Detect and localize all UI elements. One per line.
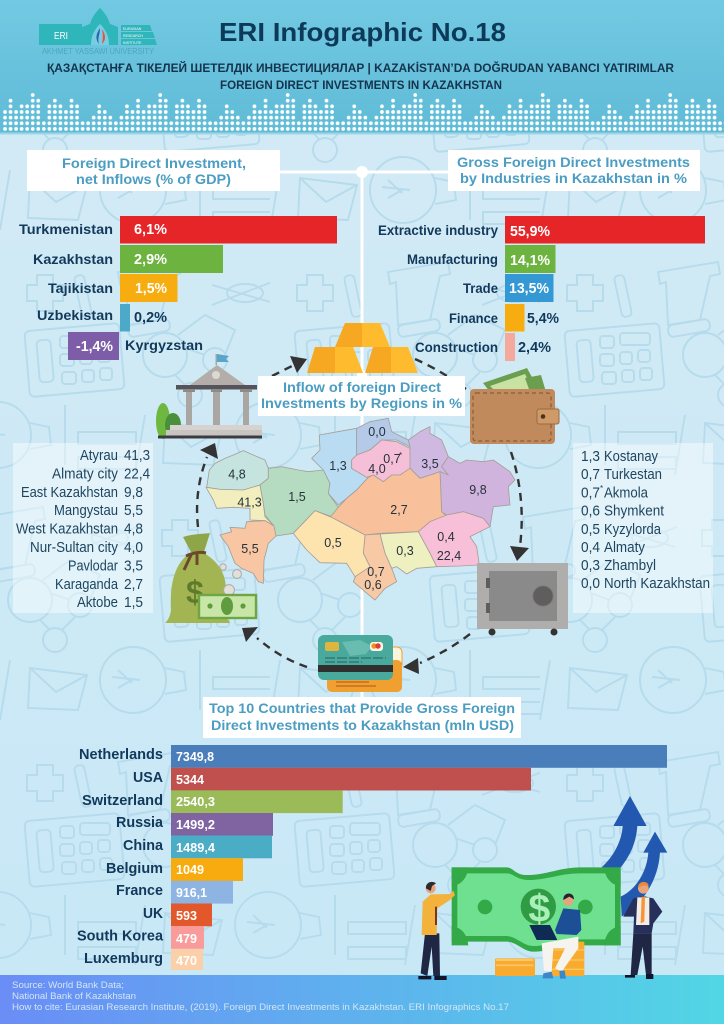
heading: top 10 countries: Top 10 Countries that Provide Gross Foreign: [209, 700, 515, 716]
logo: RESEARCH: [123, 34, 143, 38]
icon: wallet: [470, 368, 559, 444]
map value labels: 2,7: [390, 503, 408, 517]
bar chart: top 10 countries: [77, 745, 667, 970]
panel: regions list right: Kyzylorda: [604, 521, 662, 538]
map value labels: 1,3: [329, 459, 347, 473]
bar chart: FDI by industries: Trade: [463, 280, 498, 296]
panel: regions list left: 22,4: [124, 465, 150, 482]
person middle: [529, 894, 581, 979]
logo: INSTITUTE: [123, 41, 142, 45]
bar chart: top 10 countries: UK: [143, 905, 163, 922]
map value labels: 3,5: [421, 457, 439, 471]
panel: regions list right: [573, 443, 713, 613]
bar chart: top 10 countries: 1489,4: [176, 841, 215, 855]
heading: net inflows: net Inflows (% of GDP): [76, 171, 231, 187]
logo: ERI: [54, 31, 68, 42]
bar chart: FDI by industries: 55,9%: [510, 223, 550, 240]
footer band: [0, 975, 724, 1024]
panel: regions list right: Akmola: [604, 484, 649, 502]
panel: regions list left: Karaganda: [55, 576, 119, 593]
panel: regions list left: Pavlodar: [68, 557, 118, 574]
heading: industries: by Industries in Kazakhstan in %: [460, 170, 688, 186]
panel: regions list right: 0,6: [581, 502, 600, 520]
panel: regions list right: 0,4: [581, 539, 600, 556]
bar chart: FDI net inflows: -1,4%: [76, 338, 113, 355]
arrow: gold to wallet: [415, 359, 466, 389]
arrow: bank to gold: [272, 356, 307, 376]
bar chart: top 10 countries: 470: [176, 954, 197, 968]
heading: net inflows: Foreign Direct Investment,: [62, 155, 246, 171]
bar chart: FDI by industries: 13,5%: [509, 280, 549, 297]
map value labels: 4,8: [228, 468, 246, 482]
bar chart: FDI net inflows: [19, 216, 337, 360]
bar chart: FDI by industries: 5,4%: [527, 310, 559, 327]
title: ERI Infographic No.18: [219, 17, 506, 47]
panel: regions list left: Mangystau: [54, 502, 118, 519]
map value labels: 0,5: [324, 536, 342, 550]
panel: regions list left: 3,5: [124, 557, 143, 574]
bar chart: top 10 countries: Switzerland: [82, 792, 163, 809]
source and citation: National Bank of Kazakhstan: [12, 991, 136, 1002]
icon: gold bars: [307, 323, 418, 373]
bar chart: FDI by industries: Extractive industry: [378, 222, 498, 238]
illustration: investors with banknote and growth arrows: [418, 796, 667, 980]
banknote: [452, 867, 621, 952]
subtitle: FOREIGN DIRECT INVESTMENTS IN KAZAKHSTAN: [220, 78, 502, 92]
bar chart: FDI net inflows: 1,5%: [135, 280, 167, 297]
bar chart: FDI net inflows: 2,9%: [134, 251, 167, 268]
panel: regions list right: 0,7: [581, 466, 600, 483]
heading: inflow by regions: Inflow of foreign Direct: [283, 379, 441, 395]
map value labels: 5,5: [241, 542, 259, 556]
map value labels: [228, 425, 487, 592]
bar chart: top 10 countries: 479: [176, 932, 197, 946]
heading: net inflows: [27, 150, 280, 191]
bar chart: top 10 countries: Luxemburg: [84, 950, 163, 967]
panel: regions list right: Kostanay: [604, 448, 658, 465]
panel: regions list left: Aktobe: [77, 594, 118, 611]
map value labels: 4,0: [368, 462, 386, 476]
bar chart: FDI by industries: 2,4%: [518, 339, 551, 356]
bar chart: top 10 countries: Russia: [116, 814, 164, 831]
arrow: wallet to safe: [510, 452, 529, 561]
bar chart: top 10 countries: 1049: [176, 863, 204, 877]
person left: [418, 882, 455, 980]
bar chart: top 10 countries: Netherlands: [79, 746, 163, 763]
bar chart: top 10 countries: 5344: [176, 773, 204, 787]
icon: money bag with banknote: [165, 533, 256, 623]
bar chart: top 10 countries: 7349,8: [176, 750, 214, 764]
panel: regions list right: *: [600, 484, 603, 493]
panel: regions list left: 2,7: [124, 576, 143, 593]
bar chart: FDI by industries: Construction: [415, 339, 498, 355]
bar chart: FDI net inflows: Turkmenistan: [19, 221, 113, 237]
map value labels: 0,4: [437, 530, 455, 544]
panel: regions list right: 1,3: [581, 448, 600, 465]
bar chart: top 10 countries: 593: [176, 909, 197, 923]
bar chart: top 10 countries: Belgium: [106, 860, 163, 877]
icon: bank building: [156, 354, 262, 439]
panel: regions list left: 1,5: [124, 594, 143, 611]
bar chart: FDI net inflows: Kyrgyzstan: [125, 337, 203, 353]
panel: regions list left: 4,8: [124, 521, 143, 538]
heading: industries: [448, 150, 700, 191]
header band: [0, 0, 724, 134]
growth arrows: [602, 796, 667, 917]
bar chart: FDI by industries: Manufacturing: [407, 251, 498, 267]
source and citation: [12, 980, 509, 1013]
map value labels: 0,7: [367, 565, 385, 579]
banknote: $: [528, 887, 550, 931]
bar chart: top 10 countries: USA: [133, 769, 163, 786]
icon: money bag with banknote: $: [186, 574, 204, 610]
bar chart: top 10 countries: South Korea: [77, 928, 164, 944]
icon: safe: [477, 563, 568, 636]
map value labels: *: [399, 451, 402, 460]
connector lines: [280, 166, 450, 702]
panel: regions list left: Almaty city: [52, 465, 118, 482]
bar chart: FDI net inflows: Tajikistan: [48, 280, 113, 296]
panel: regions list right: 0,7: [581, 484, 600, 502]
bar chart: FDI by industries: 14,1%: [510, 252, 550, 269]
map value labels: 0,7: [383, 452, 401, 466]
panel: regions list right: 0,3: [581, 557, 600, 574]
panel: regions list left: Atyrau: [80, 447, 118, 464]
bar chart: top 10 countries: France: [116, 882, 163, 899]
map value labels: 41,3: [237, 496, 262, 510]
panel: regions list right: Turkestan: [604, 466, 662, 483]
bar chart: FDI by industries: [378, 216, 705, 361]
bar chart: top 10 countries: China: [123, 837, 164, 854]
panel: regions list right: Shymkent: [604, 502, 665, 520]
panel: regions list right: Zhambyl: [604, 557, 656, 574]
person right: [623, 882, 662, 979]
panel: regions list left: East Kazakhstan: [21, 484, 118, 501]
arrow: safe to card: [403, 634, 470, 674]
heading: inflow by regions: Investments by Regions in %: [261, 395, 463, 411]
heading: industries: Gross Foreign Direct Investments: [457, 154, 690, 170]
bar chart: top 10 countries: 1499,2: [176, 818, 215, 832]
map value labels: 9,8: [469, 483, 487, 497]
panel: regions list left: West Kazakhstan: [16, 521, 118, 538]
logo: EURASIAN: [123, 27, 142, 31]
icon: credit cards: [318, 635, 402, 692]
heading: top 10 countries: [203, 697, 521, 738]
map value labels: 1,5: [288, 490, 306, 504]
source and citation: How to cite: Eurasian Research Institute, (2019). Foreign Direct Investments in Kazakhstan. ERI Infographics No.17: [12, 1002, 509, 1013]
bar chart: top 10 countries: 916,1: [176, 886, 207, 900]
panel: regions list left: 4,0: [124, 539, 143, 556]
panel: regions list right: 0,5: [581, 521, 600, 538]
subtitle: ҚАЗАҚСТАНҒА ТІКЕЛЕЙ ШЕТЕЛДІК ИНВЕСТИЦИЯЛАР | KAZAKİSTAN’DA DOĞRUDAN YABANCI YATIRIMLAR: [47, 60, 674, 75]
map value labels: 22,4: [437, 549, 461, 563]
heading: top 10 countries: Direct Investments to Kazakhstan (mln USD): [211, 717, 514, 733]
bar chart: FDI by industries: Finance: [449, 310, 498, 326]
subtitle: [47, 60, 674, 92]
bar chart: FDI net inflows: Uzbekistan: [37, 307, 113, 323]
map value labels: 0,0: [368, 425, 386, 439]
panel: regions list left: 9,8: [124, 484, 143, 501]
logo: AKHMET YASSAWI UNIVERSITY: [42, 47, 155, 56]
bar chart: FDI net inflows: 0,2%: [134, 309, 167, 326]
source and citation: Source: World Bank Data;: [12, 980, 124, 991]
map of Kazakhstan: [206, 418, 515, 600]
map value labels: 0,6: [364, 578, 382, 592]
coin stacks: [495, 942, 584, 976]
panel: regions list left: 5,5: [124, 502, 143, 519]
map value labels: 0,3: [396, 544, 414, 558]
panel: regions list right: Almaty: [604, 539, 645, 556]
logo: [39, 8, 157, 56]
panel: regions list left: [13, 443, 153, 613]
arrow: card to money bag: [242, 627, 307, 667]
bar chart: top 10 countries: 2540,3: [176, 795, 215, 809]
arrow: money bag to bank: [197, 443, 218, 527]
bar chart: FDI net inflows: 6,1%: [134, 221, 167, 238]
panel: regions list left: Nur-Sultan city: [30, 539, 118, 556]
panel: regions list left: 41,3: [124, 447, 150, 464]
bar chart: FDI net inflows: Kazakhstan: [33, 251, 113, 267]
panel: regions list right: North Kazakhstan: [604, 575, 710, 592]
heading: inflow by regions: [258, 376, 465, 416]
panel: regions list right: 0,0: [581, 575, 600, 592]
